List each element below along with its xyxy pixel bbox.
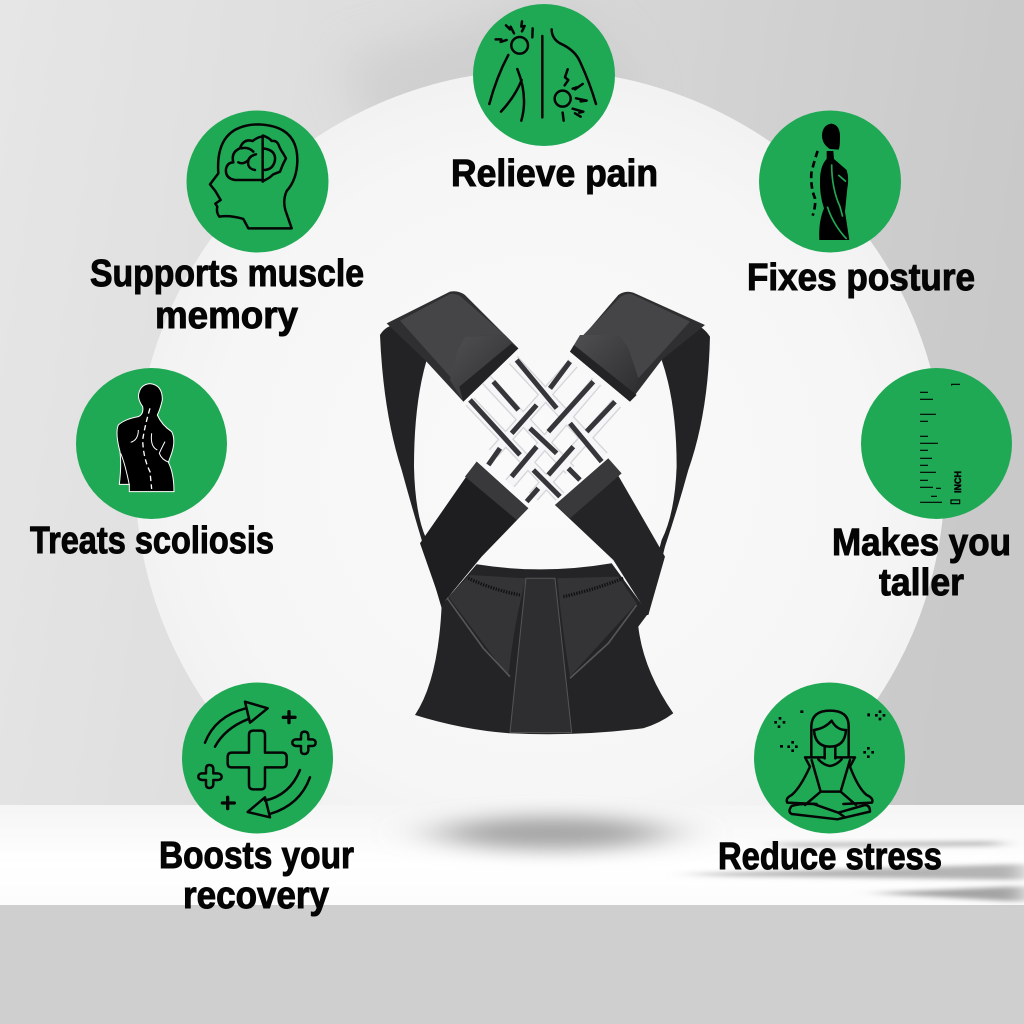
icon: aching shoulder and back [489, 21, 596, 121]
benefit: boosts your recovery [159, 682, 354, 917]
icon: side profile body with spine [811, 124, 849, 240]
label: two lines: taller [879, 562, 964, 604]
benefit: relieve pain [451, 4, 658, 195]
right lower strap [555, 458, 665, 615]
label: two lines: memory [155, 295, 298, 337]
benefit: makes you taller [832, 368, 1012, 604]
product: posture corrector vest [380, 291, 710, 734]
left back strap [380, 325, 448, 610]
label: Fixes posture [747, 257, 975, 299]
icon: height ruler with inch scale [920, 384, 960, 504]
benefit: supports muscle memory [90, 110, 364, 337]
label: two lines: Supports muscle [90, 253, 364, 295]
label: two lines: Boosts your [159, 835, 354, 877]
icon: medical cross with recovery arrows [198, 702, 316, 817]
label: Reduce stress [718, 836, 942, 878]
benefit: treats scoliosis [30, 368, 274, 562]
icon: meditating woman [774, 710, 885, 819]
label: two lines: Makes you [832, 522, 1011, 564]
left lower strap [420, 462, 528, 605]
icon: head with brain and gear [210, 124, 297, 228]
right shoulder pad [570, 292, 705, 402]
benefit: fixes posture [747, 110, 975, 299]
label: two lines [159, 835, 354, 917]
lattice of elastic bands [470, 360, 617, 502]
label: Relieve pain [451, 153, 658, 195]
benefit: reduce stress [718, 682, 942, 878]
label: two lines: recovery [183, 875, 329, 917]
left shoulder pad [387, 291, 518, 402]
label: two lines [90, 253, 364, 337]
right back strap [642, 324, 710, 615]
label: Treats scoliosis [30, 520, 274, 562]
label: two lines [832, 522, 1011, 604]
icon: back view with curved spine [117, 384, 174, 492]
ruler unit: INCH [953, 471, 963, 493]
waist belt [415, 563, 673, 734]
